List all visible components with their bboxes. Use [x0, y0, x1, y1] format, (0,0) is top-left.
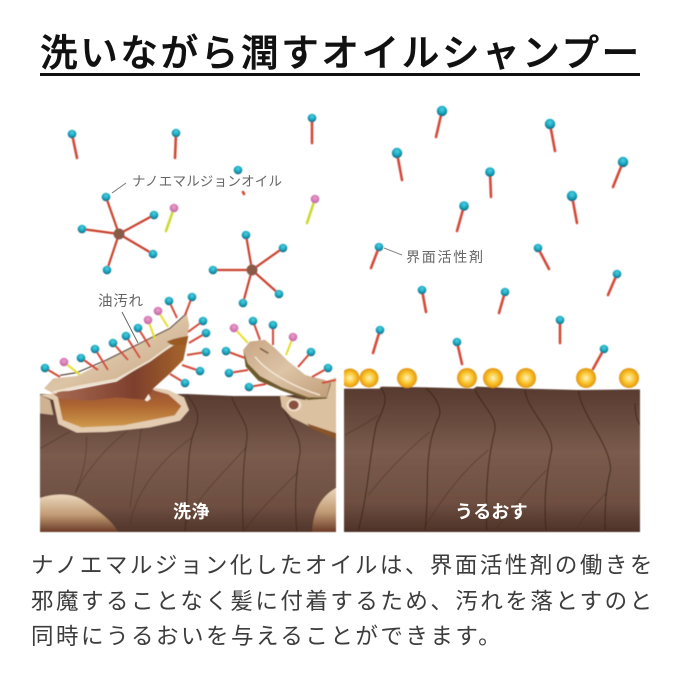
title underline	[40, 73, 640, 76]
surfactant molecules: right	[371, 106, 628, 369]
label: nano emulsion oil	[112, 174, 282, 193]
hair shaft: right	[340, 368, 642, 532]
label: oil dirt	[98, 293, 144, 343]
flake: bottom left	[40, 494, 118, 532]
molecules attached to dirt: flake 2	[222, 317, 336, 391]
illustration: two hair panels	[39, 105, 641, 533]
label: nano emulsion oil: ナノエマルジョンオイル	[132, 174, 282, 189]
hair shaft: left	[30, 313, 340, 535]
body text: 邪魔することなく髪に付着するため、汚れを落とすのと	[31, 588, 655, 614]
title: 洗いながら潤すオイルシャンプー	[40, 32, 642, 74]
body text: 同時にうるおいを与えることができます。	[31, 624, 503, 649]
label: moisturise: うるおす	[455, 502, 528, 522]
panel: cleansing (left)	[30, 114, 340, 535]
label: oil dirt: 油汚れ	[98, 293, 144, 310]
flake: oil pool and lifted cuticle (coordinates of 3x crop at 40,300)	[40, 313, 189, 433]
nano emulsion oil cluster 1	[78, 193, 158, 274]
body text	[31, 553, 655, 649]
oil droplets on hair	[340, 368, 639, 388]
flake: bottom right	[312, 488, 336, 532]
label: surfactant: 界面活性剤	[406, 249, 483, 265]
molecules attached to dirt: flake 1	[41, 293, 210, 387]
surfactant molecules: left top	[72, 118, 312, 194]
nano emulsion oil cluster 2	[209, 231, 287, 307]
panel: moisturising (right)	[340, 106, 642, 532]
label: cleansing: 洗浄	[173, 502, 210, 522]
body text: ナノエマルジョン化したオイルは、界面活性剤の働きを	[31, 553, 655, 578]
flake: right cuticle (coordinates of 3x crop at 225,320)	[243, 340, 338, 439]
